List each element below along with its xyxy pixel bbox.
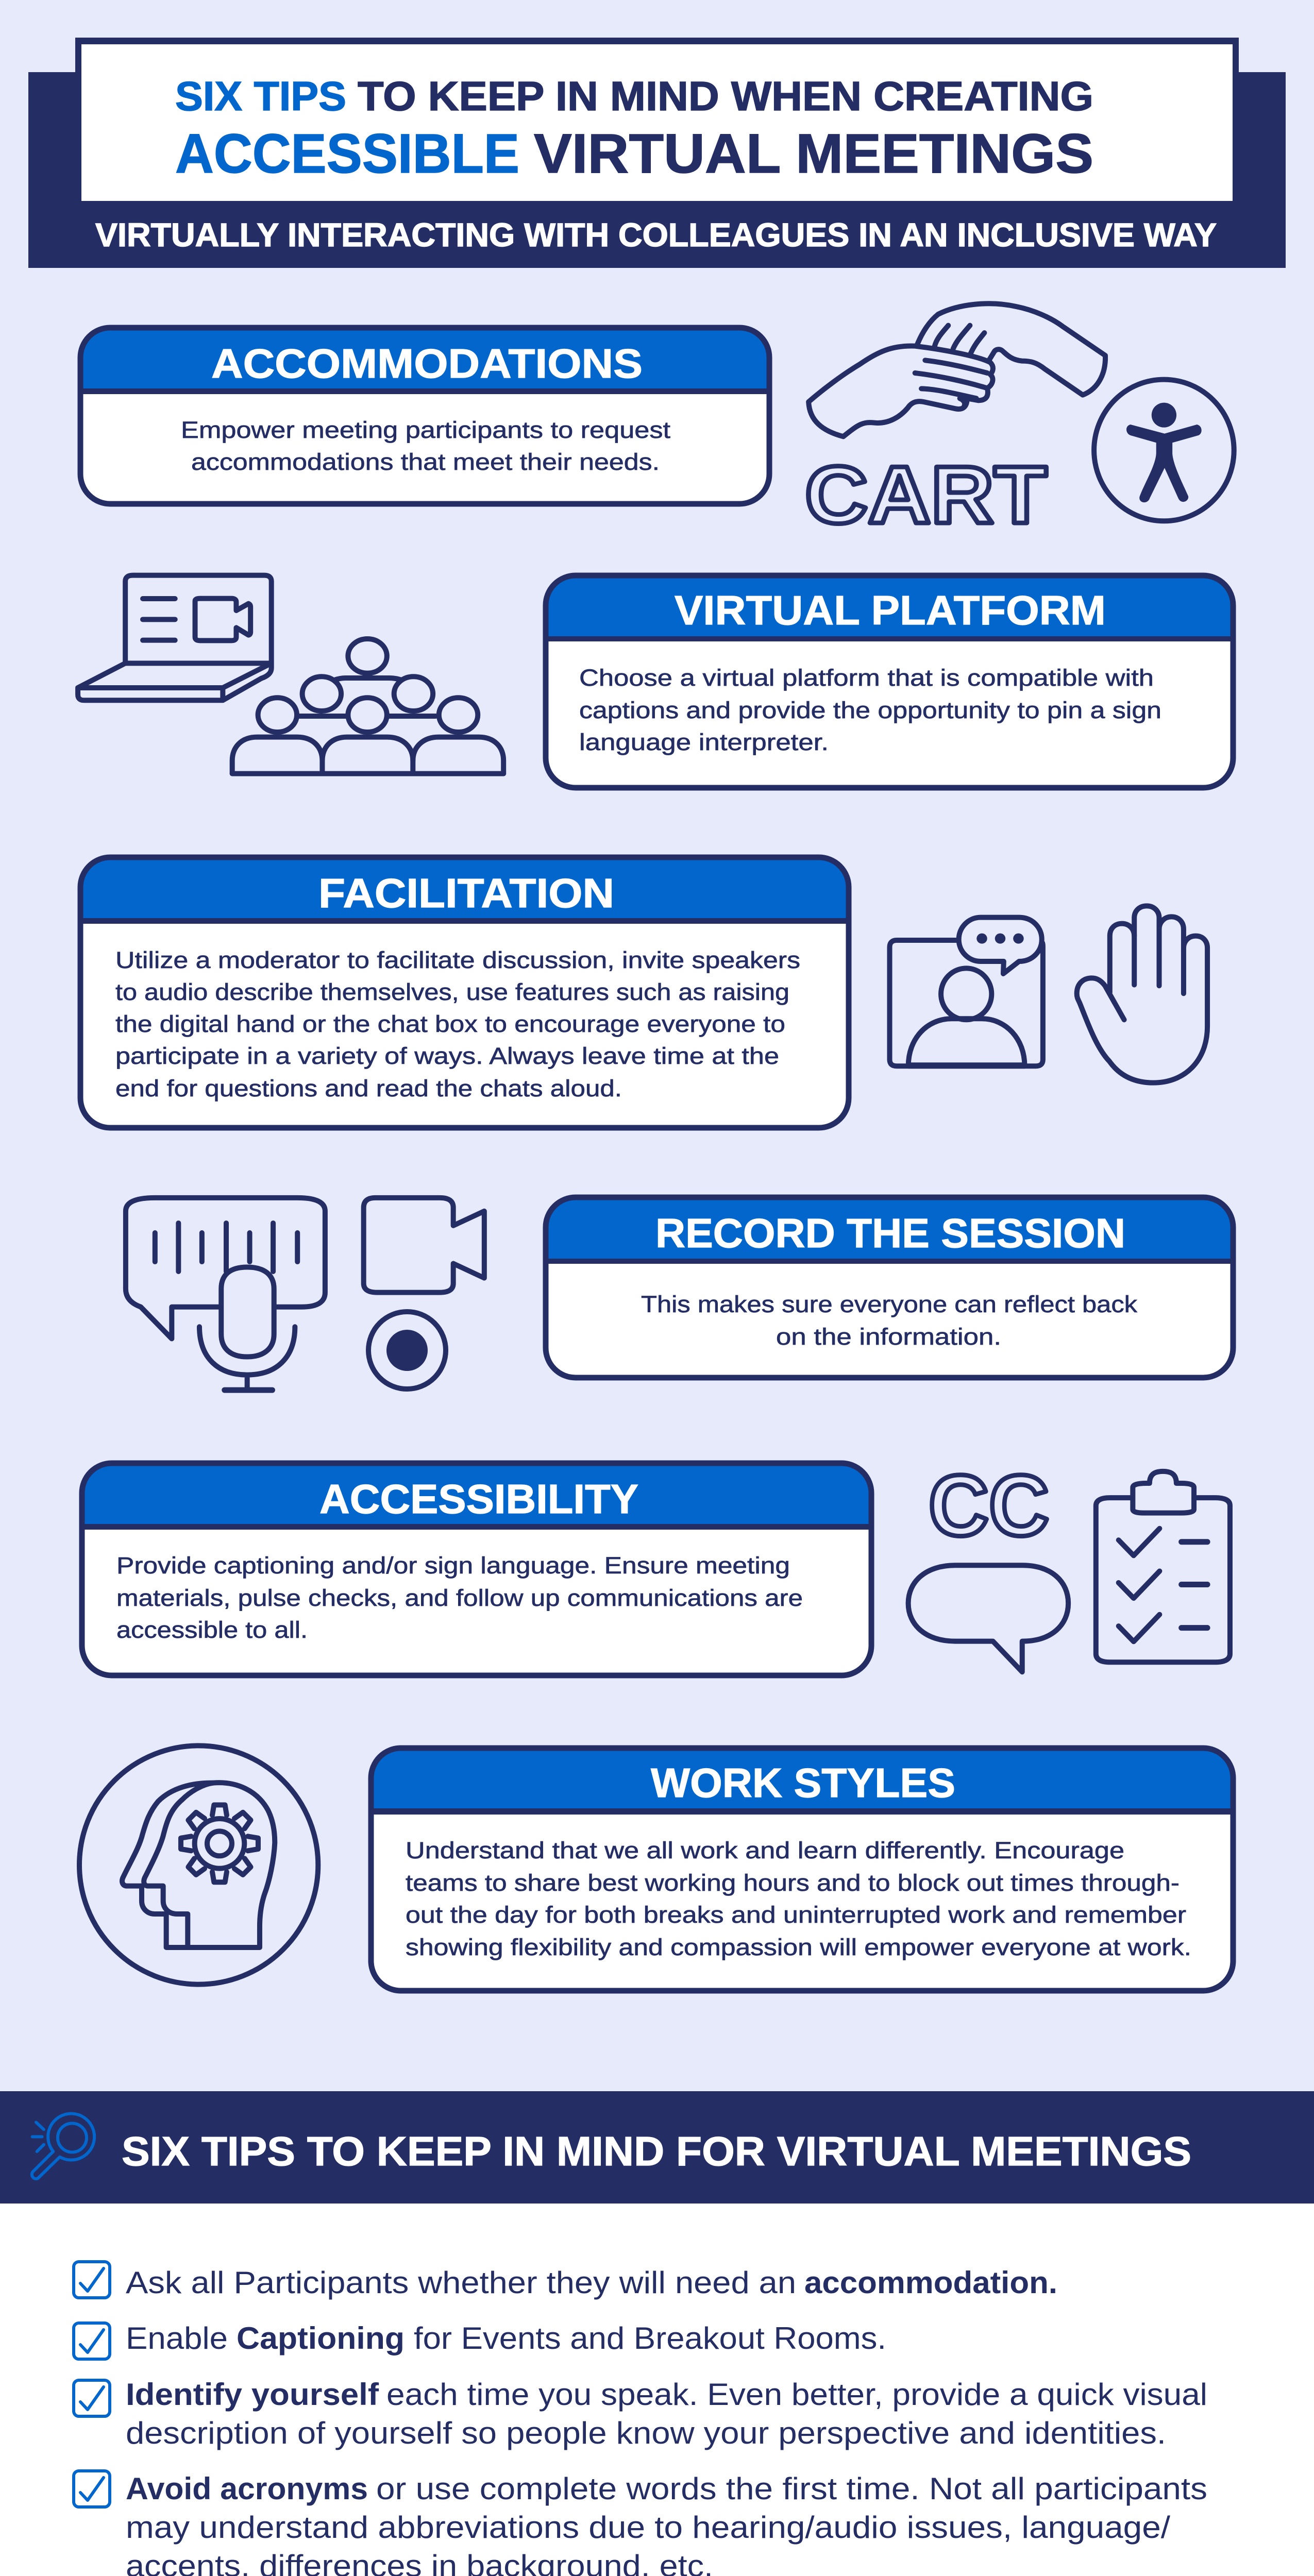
heading: six tips: SIX TIPS TO KEEP IN MIND FOR VIRTUAL MEETINGS	[122, 2128, 1191, 2174]
icon: CART outlined word: CART	[805, 450, 1047, 540]
text: record body: on the information.	[776, 1324, 1001, 1350]
header banner	[28, 38, 1286, 268]
text: facilitation body	[115, 947, 800, 1101]
heading: facilitation: FACILITATION	[318, 870, 614, 916]
text: virtual platform body	[579, 665, 1161, 755]
icon: checkbox	[74, 2262, 110, 2298]
icon: audience of people	[232, 639, 503, 774]
checklist item 2	[74, 2321, 886, 2359]
title	[175, 73, 1093, 184]
checklist item 3	[74, 2377, 1207, 2450]
checklist item 2: Captioning	[237, 2321, 405, 2355]
heading: work styles: WORK STYLES	[651, 1760, 955, 1806]
heading: virtual platform: VIRTUAL PLATFORM	[675, 587, 1106, 633]
panel: facilitation	[80, 857, 849, 1128]
text: accessibility body: materials, pulse checks, and follow up communications are	[116, 1585, 803, 1611]
text: facilitation body: participate in a variety of ways. Always leave time at the	[115, 1043, 779, 1069]
checklist item 2: Enable	[126, 2321, 228, 2355]
icon: video participant with chat bubble	[889, 918, 1043, 1066]
panel: record the session	[546, 1197, 1233, 1378]
subtitle: VIRTUALLY INTERACTING WITH COLLEAGUES IN AN INCLUSIVE WAY	[95, 216, 1217, 253]
text: facilitation body: end for questions and read the chats aloud.	[115, 1075, 622, 1101]
text: accommodations body	[181, 417, 671, 475]
heading: accessibility: ACCESSIBILITY	[319, 1476, 638, 1522]
checklist item 4: or use complete words the first time. Not all participants	[376, 2471, 1207, 2506]
title: VIRTUAL MEETINGS	[534, 122, 1093, 184]
text: work styles body: teams to share best working hours and to block out times through-	[406, 1870, 1180, 1896]
text: facilitation body: the digital hand or the chat box to encourage everyone to	[115, 1011, 785, 1037]
text: accessibility body: accessible to all.	[116, 1617, 308, 1643]
title: SIX TIPS	[175, 73, 346, 119]
checklist item 2: for Events and Breakout Rooms.	[414, 2321, 886, 2355]
text: accessibility body	[116, 1552, 803, 1643]
text: work styles body: Understand that we all work and learn differently. Encourage	[406, 1837, 1124, 1863]
icon: laptop with video camera	[78, 575, 272, 700]
text: work styles body: out the day for both breaks and uninterrupted work and remember	[406, 1902, 1186, 1928]
icon: raised hand	[1077, 906, 1207, 1083]
checklist item 3: description of yourself so people know your perspective and identities.	[126, 2416, 1166, 2450]
panel: virtual platform	[546, 575, 1233, 788]
icon: checkbox	[74, 2471, 110, 2507]
checklist item 4: may understand abbreviations due to hearing/audio issues, language/	[126, 2510, 1170, 2545]
checklist item 3: Identify yourself	[126, 2377, 379, 2412]
heading: accommodations: ACCOMMODATIONS	[211, 341, 643, 386]
text: work styles body	[406, 1837, 1191, 1960]
panel: accessibility	[82, 1463, 871, 1675]
text: record body	[641, 1291, 1138, 1350]
heading: record the session: RECORD THE SESSION	[655, 1210, 1125, 1256]
icon: magnifying glass	[32, 2113, 94, 2179]
icon: checkbox	[74, 2323, 110, 2359]
panel: work styles	[371, 1748, 1233, 1991]
icon: microphone with speech bubble	[126, 1198, 325, 1390]
icon: accessibility person in circle	[1094, 380, 1234, 521]
checklist item 3: each time you speak. Even better, provide a quick visual	[386, 2377, 1207, 2412]
checklist item 4	[74, 2471, 1207, 2576]
text: record body: This makes sure everyone can reflect back	[641, 1291, 1138, 1317]
icon: empty speech bubble	[908, 1565, 1068, 1672]
checklist item 1	[74, 2262, 1057, 2300]
title: ACCESSIBLE	[175, 122, 519, 184]
icon: checkbox	[74, 2380, 110, 2416]
text: virtual platform body: Choose a virtual platform that is compatible with	[579, 665, 1154, 691]
checklist item 1: accommodation.	[804, 2265, 1057, 2300]
text: accessibility body: Provide captioning and/or sign language. Ensure meeting	[116, 1552, 790, 1579]
section banner: six tips	[0, 2091, 1314, 2204]
text: facilitation body: Utilize a moderator to facilitate discussion, invite speakers	[115, 947, 800, 973]
text: accommodations body: accommodations that meet their needs.	[191, 449, 660, 475]
text: virtual platform body: language interpreter.	[579, 729, 829, 755]
icon: closed captions CC: CC	[929, 1457, 1049, 1554]
text: virtual platform body: captions and provide the opportunity to pin a sign	[579, 697, 1161, 723]
text: accommodations body: Empower meeting participants to request	[181, 417, 671, 443]
icon: checklist clipboard	[1096, 1471, 1230, 1662]
checklist item 4: Avoid acronyms	[126, 2471, 368, 2506]
text: work styles body: showing flexibility and compassion will empower everyone at work.	[406, 1934, 1191, 1960]
panel: accommodations	[80, 328, 769, 504]
icon: clasped hands	[808, 303, 1105, 436]
checklist item 1: Ask all Participants whether they will need an	[126, 2265, 796, 2300]
icon: video camera and record button	[364, 1198, 484, 1389]
text: facilitation body: to audio describe themselves, use features such as raising	[115, 979, 789, 1005]
icon: head with gear in circle	[79, 1745, 318, 1985]
title: TO KEEP IN MIND WHEN CREATING	[358, 73, 1093, 119]
